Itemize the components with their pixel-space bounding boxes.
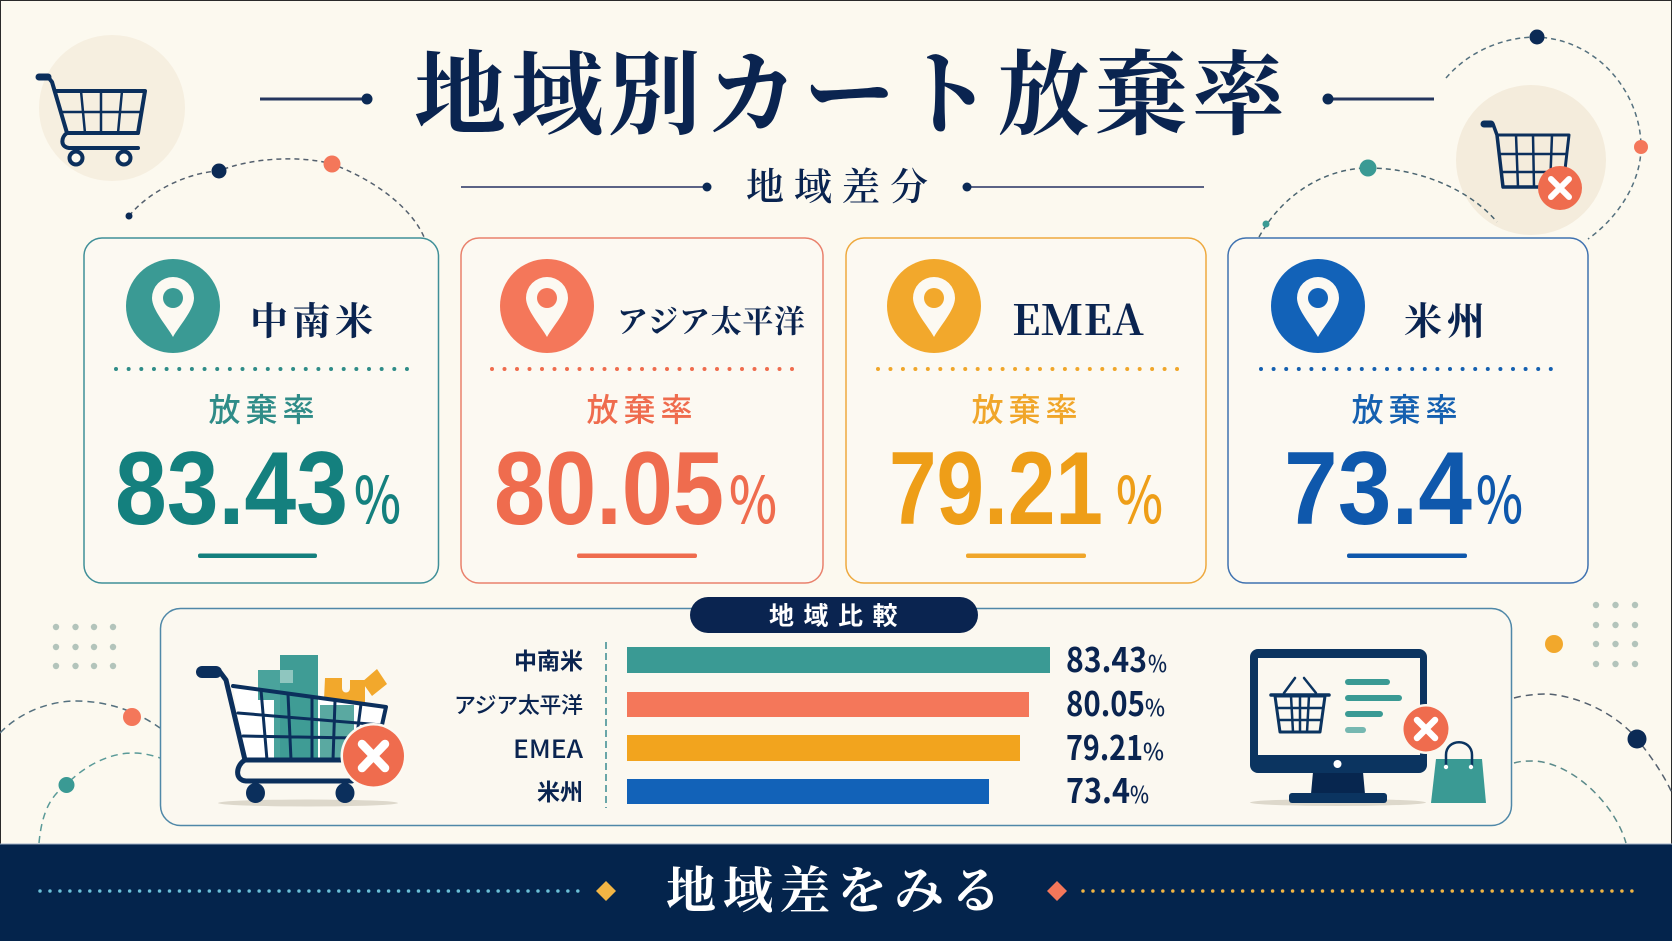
icon: full cart with x	[202, 655, 406, 806]
row: 米州: 73.4	[1066, 764, 1130, 813]
row: EMEA	[513, 721, 1164, 770]
value: %	[1476, 450, 1523, 542]
panel: EMEA	[846, 238, 1206, 583]
icon: location pin coral	[500, 259, 594, 353]
decorative arc: teal top right	[1259, 160, 1497, 237]
underline	[198, 554, 317, 558]
panel: region comparison	[160, 596, 1512, 826]
panel: 中南米	[84, 238, 438, 583]
decorative arcs: bottom left	[0, 701, 160, 843]
icon: location pin orange	[887, 259, 981, 353]
label: 放棄率	[208, 385, 320, 431]
dotted divider	[492, 367, 794, 371]
decorative orange dot	[1545, 635, 1563, 653]
panel: アジア太平洋	[461, 238, 823, 583]
bar chart	[454, 633, 1167, 813]
title line left	[260, 94, 372, 104]
dot grid: left	[53, 624, 116, 669]
row: アジア太平洋	[454, 677, 1165, 726]
row: 米州	[537, 764, 1149, 813]
underline	[966, 554, 1086, 558]
value: 73.4	[1284, 431, 1472, 547]
region name: アジア太平洋	[617, 296, 805, 342]
row: EMEA: EMEA	[513, 730, 583, 766]
value: %	[1116, 450, 1163, 542]
dotted divider	[878, 367, 1179, 371]
basket	[1271, 678, 1329, 732]
row: アジア太平洋: アジア太平洋	[454, 688, 583, 720]
value: %	[729, 450, 777, 542]
region name: EMEA	[1012, 288, 1144, 348]
dot grid: right	[1593, 602, 1638, 667]
panel: 米州	[1228, 238, 1588, 583]
row: 中南米: %	[1148, 645, 1167, 679]
icon: cart top left	[39, 35, 185, 181]
row: アジア太平洋: %	[1145, 689, 1165, 723]
row: 中南米	[514, 633, 1167, 682]
footer text: 地域差をみる	[666, 851, 1008, 923]
row: 米州: %	[1130, 776, 1149, 810]
subtitle line left	[461, 182, 712, 192]
decorative arc: top right	[1446, 30, 1648, 239]
row: EMEA: %	[1143, 733, 1164, 767]
underline	[577, 554, 697, 558]
icon: location pin teal	[126, 259, 220, 353]
value: %	[354, 450, 401, 542]
subtitle line right	[962, 182, 1204, 192]
dotted divider	[116, 367, 408, 371]
diamond right	[1047, 881, 1067, 901]
title line right	[1322, 94, 1434, 104]
row: 米州: 米州	[537, 773, 583, 807]
footer banner	[0, 844, 1672, 941]
icon: monitor with basket and bag	[1250, 649, 1486, 806]
heading pill	[690, 596, 978, 633]
diamond left	[596, 881, 616, 901]
decorative arc: top left	[126, 156, 424, 237]
row: アジア太平洋: 80.05	[1066, 677, 1145, 726]
dotted line right	[1083, 889, 1632, 893]
region name: 中南米	[250, 290, 378, 346]
label: 放棄率	[586, 385, 698, 431]
value: 83.43	[115, 431, 348, 547]
row: 中南米: 83.43	[1066, 633, 1147, 682]
dotted divider	[1261, 367, 1552, 371]
row: 中南米: 中南米	[514, 642, 583, 676]
icon: cart with x top right	[1456, 85, 1606, 235]
decorative arcs: bottom right	[1514, 694, 1672, 843]
value: 79.21	[889, 431, 1103, 547]
region name: 米州	[1404, 290, 1490, 346]
bag	[1431, 759, 1486, 803]
underline	[1347, 554, 1467, 558]
label: 放棄率	[1352, 385, 1463, 431]
icon: location pin blue	[1271, 259, 1365, 353]
label: 放棄率	[972, 385, 1083, 431]
text lines	[1345, 679, 1402, 733]
title: 地域別カート放棄率	[414, 22, 1290, 154]
axis	[605, 642, 607, 808]
dotted line left	[40, 889, 578, 893]
value: 80.05	[494, 431, 724, 547]
heading pill: 地域比較	[769, 596, 907, 632]
row: EMEA: 79.21	[1066, 721, 1143, 770]
subtitle: 地域差分	[746, 156, 938, 211]
